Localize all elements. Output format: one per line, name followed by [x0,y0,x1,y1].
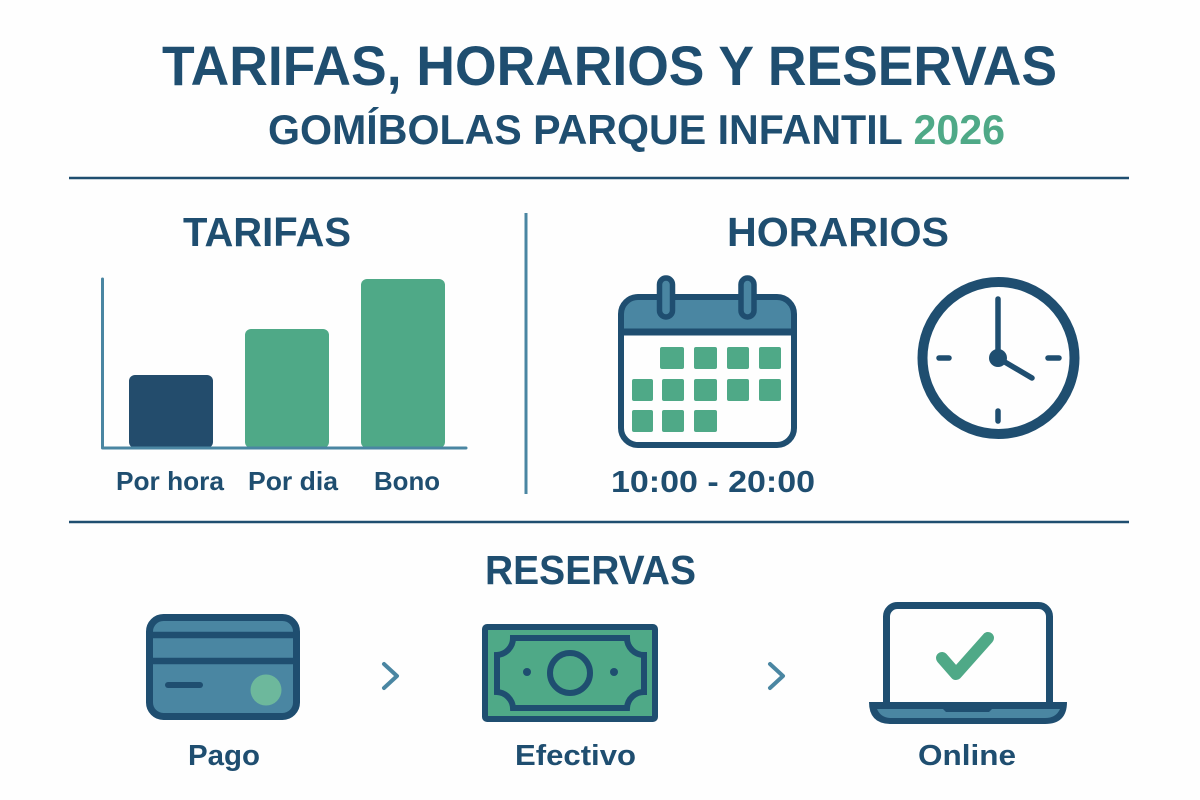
icon: clock [922,282,1074,434]
opening hours: 10:00 - 20:00 [611,464,815,499]
panel: horarios [611,209,1074,499]
method labels: Pago [188,740,260,772]
bar labels: Bono [374,466,440,496]
bar labels [116,466,440,496]
method labels: Online [918,740,1016,772]
arrow [384,664,397,688]
icon: laptop with check [869,606,1067,724]
heading: tarifas: TARIFAS [183,209,351,255]
arrow [770,664,783,688]
main title: TARIFAS, HORARIOS Y RESERVAS [162,34,1057,97]
method labels: Efectivo [515,740,636,772]
panel: reservas [150,547,1067,772]
bar labels: Por dia [248,466,339,496]
method labels [188,740,1016,772]
icon: credit card [150,618,296,716]
icon: calendar [621,278,794,445]
icon: banknote [485,627,655,719]
title block [162,34,1057,153]
heading: horarios: HORARIOS [727,209,949,255]
bar chart [102,279,466,448]
panel: tarifas [102,209,466,496]
heading: reservas: RESERVAS [485,547,696,593]
bar labels: Por hora [116,466,225,496]
subtitle: GOMÍBOLAS PARQUE INFANTIL 2026 [268,106,1005,153]
